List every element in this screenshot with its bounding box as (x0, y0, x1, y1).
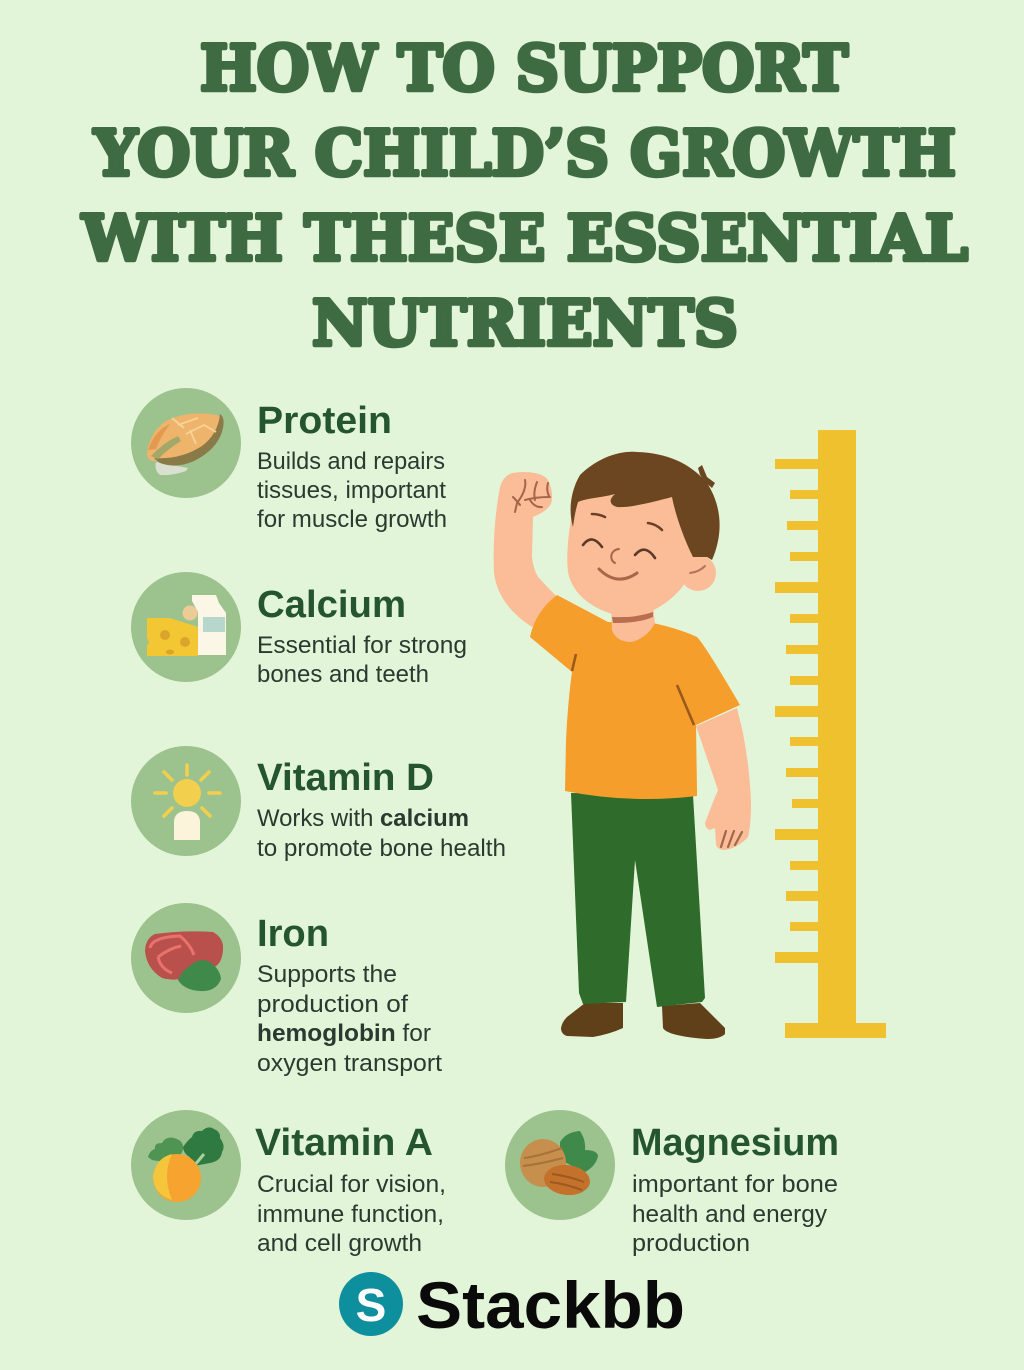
heading: vitamin D: Vitamin D (257, 757, 434, 799)
text: vitamin D description (257, 805, 506, 862)
text: vitamin A description: Crucial for vision, (257, 1171, 446, 1198)
text: iron description: oxygen transport (257, 1050, 442, 1077)
heading: protein: Protein (257, 400, 392, 442)
boy: lowered arm (696, 708, 751, 850)
text: protein description: Builds and repairs (257, 448, 445, 475)
text: protein description: for muscle growth (257, 506, 447, 533)
text: magnesium description (632, 1171, 838, 1257)
boy: raised arm (494, 472, 557, 627)
title: HOW TO SUPPORT (200, 31, 848, 105)
logo wordmark: Stackbb (416, 1268, 685, 1342)
title (81, 31, 968, 360)
icon: salmon steak (131, 388, 241, 498)
boy: neck (611, 605, 655, 642)
heading: iron: Iron (257, 913, 329, 955)
text: calcium description: bones and teeth (257, 661, 429, 688)
text: iron description: production of (257, 991, 408, 1018)
heading: calcium: Calcium (257, 584, 406, 626)
title: NUTRIENTS (312, 286, 738, 360)
text: iron description (257, 961, 442, 1077)
text: iron description: hemoglobin for (257, 1020, 431, 1047)
text: protein description (257, 448, 447, 533)
title: WITH THESE ESSENTIAL (81, 201, 968, 275)
illustration: boy flexing (494, 452, 751, 1039)
boy: raised fist finger lines (513, 480, 550, 512)
panel: iron (131, 903, 442, 1077)
logo mark: S (356, 1279, 386, 1331)
icon: nuts and leaves (505, 1110, 615, 1220)
text: magnesium description: production (632, 1230, 750, 1257)
heading: magnesium: Magnesium (631, 1122, 839, 1164)
panel: protein (131, 388, 447, 533)
title: YOUR CHILD’S GROWTH (93, 116, 956, 190)
boy: shirt (530, 595, 740, 799)
logo mark (339, 1272, 403, 1336)
text: vitamin A description: immune function, (257, 1201, 444, 1228)
text: vitamin D description: Works with calcium (257, 805, 469, 832)
text: calcium description (257, 632, 467, 688)
text: magnesium description: important for bone (632, 1171, 838, 1198)
text: iron description: Supports the (257, 961, 397, 988)
heading: vitamin A: Vitamin A (255, 1122, 433, 1164)
icon: cheese and milk (131, 572, 241, 682)
boy: facial features (583, 514, 662, 579)
text: calcium description: Essential for strong (257, 632, 467, 659)
icon: orange vegetable with leaves (131, 1110, 241, 1220)
panel: vitamin D (131, 746, 506, 862)
boy: face (567, 470, 695, 617)
text: magnesium description: health and energy (632, 1201, 827, 1228)
boy: shoes (561, 1003, 725, 1039)
boy: trousers (571, 793, 705, 1007)
boy: hair (571, 452, 720, 560)
boy: finger lines on lowered hand (721, 831, 742, 847)
panel: vitamin A (131, 1110, 446, 1257)
icon: sun and milk (131, 746, 241, 856)
height ruler (775, 430, 886, 1038)
text: protein description: tissues, important (257, 477, 446, 504)
text: vitamin A description: and cell growth (257, 1230, 422, 1257)
panel: magnesium (505, 1110, 839, 1257)
logo: Stackbb (339, 1268, 685, 1342)
boy: ear (680, 555, 716, 591)
panel: calcium (131, 572, 467, 688)
text: vitamin D description: to promote bone health (257, 835, 506, 862)
icon: red meat and greens (131, 903, 241, 1013)
text: vitamin A description (257, 1171, 446, 1257)
